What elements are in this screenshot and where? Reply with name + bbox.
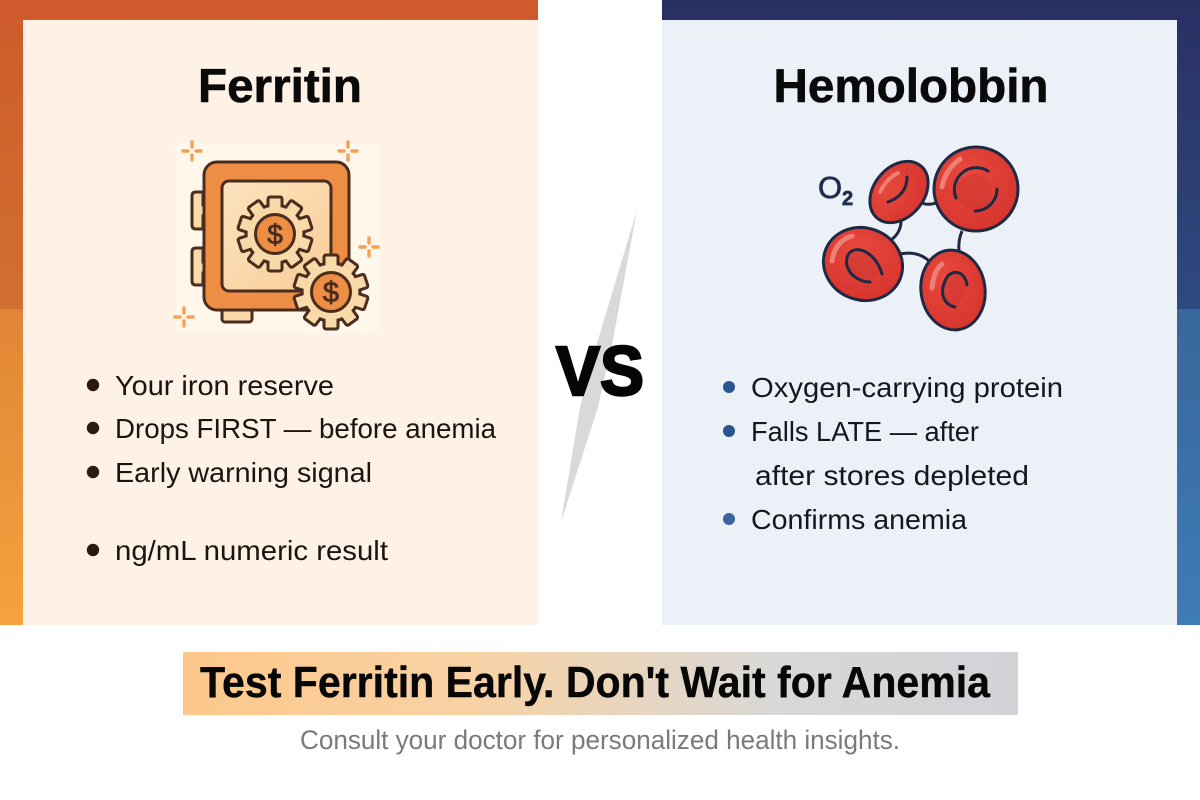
label: O2: O (818, 170, 842, 205)
gear: small dollar (238, 197, 312, 271)
safe door (222, 181, 331, 291)
heading: hemolobbin: Hemolobbin (774, 59, 1048, 112)
label: O2 (818, 170, 853, 210)
list: hemoglobin facts: after stores depleted (755, 460, 1029, 491)
banner: call to action: Test Ferritin Early. Don't Wait for Anemia (200, 658, 990, 707)
list: ferritin facts: ng/mL numeric result (115, 535, 388, 566)
label: O2: 2 (842, 188, 853, 210)
cell: lower (916, 246, 990, 334)
cell: small (858, 150, 940, 234)
list: ferritin facts: Drops FIRST — before anemia (115, 413, 496, 444)
panel: ferritin (0, 0, 538, 625)
gear: large dollar: $ (323, 277, 339, 309)
gear: large dollar (294, 255, 368, 329)
heading: ferritin: Ferritin (198, 59, 362, 112)
safe foot (222, 309, 252, 322)
list: hemoglobin facts: Confirms anemia (751, 504, 967, 535)
cell: left (813, 216, 913, 312)
panel: hemoglobin (662, 0, 1200, 625)
safe hinges (192, 192, 212, 285)
list: ferritin facts (87, 370, 496, 566)
list: hemoglobin facts: Oxygen-carrying protein (751, 372, 1063, 403)
list: hemoglobin facts: Falls LATE — after (751, 416, 979, 447)
footer note: Consult your doctor for personalized health insights. (300, 725, 900, 755)
icon: red blood cells (813, 147, 1018, 334)
safe body (204, 162, 349, 310)
divider slash (561, 210, 637, 522)
label: VS: VS (556, 332, 644, 410)
cell: large (934, 147, 1018, 231)
icon: safe with gears (175, 142, 380, 333)
list: ferritin facts: Your iron reserve (115, 370, 334, 401)
gear: small dollar: $ (267, 219, 283, 250)
connectors (891, 202, 962, 264)
list: hemoglobin facts (723, 372, 1063, 535)
sparkles (175, 142, 378, 326)
list: ferritin facts: Early warning signal (115, 457, 372, 488)
